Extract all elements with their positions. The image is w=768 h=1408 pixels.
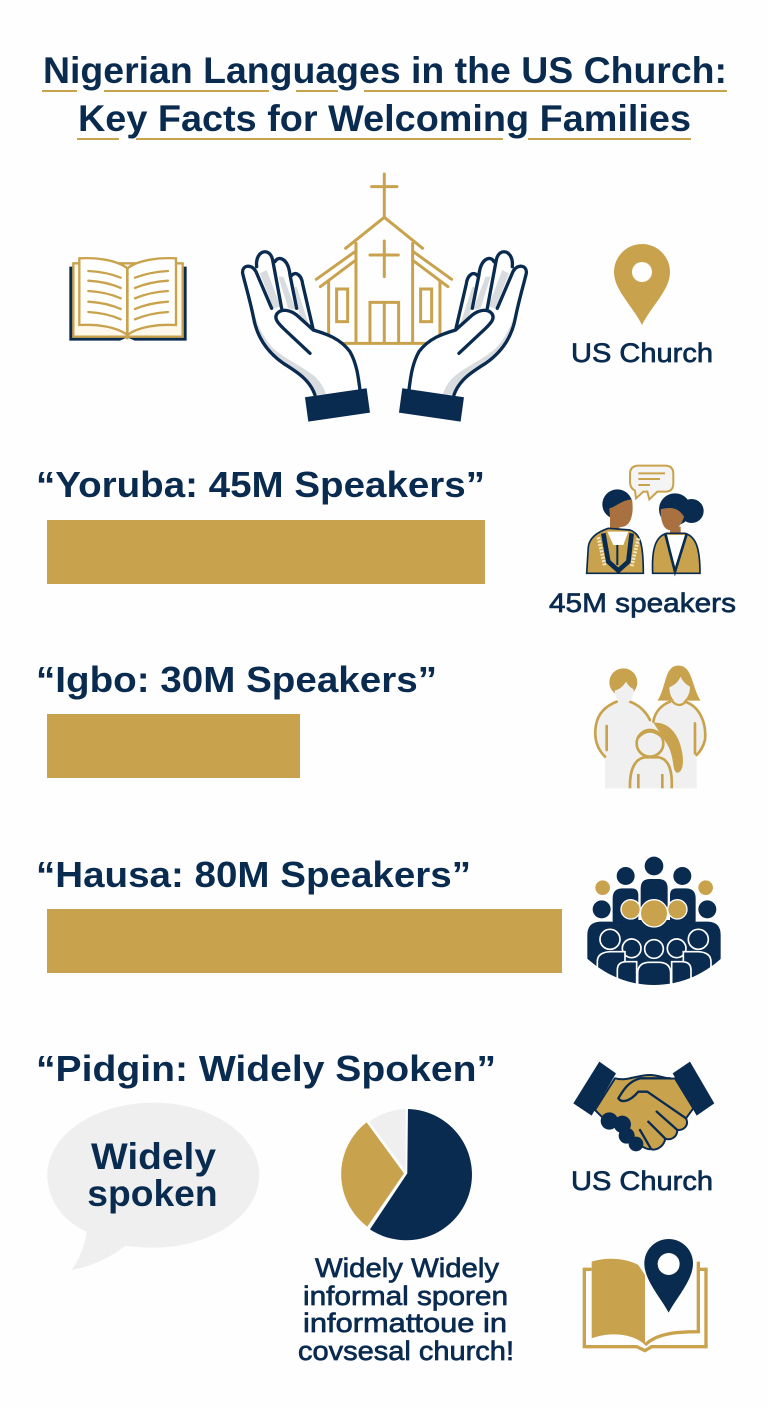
title: Key Facts for Welcoming Families	[78, 98, 691, 139]
icon: book with location pin	[584, 1239, 706, 1351]
speech bubble: spoken	[87, 1173, 218, 1214]
title: Nigerian Languages in the US Church:	[43, 50, 727, 91]
icon: handshake	[573, 1062, 714, 1151]
church	[316, 174, 452, 343]
icon: two speakers in conversation	[587, 466, 704, 573]
heading: Pidgin: “Pidgin: Widely Spoken”	[36, 1048, 496, 1089]
icon: location pin with label	[571, 244, 713, 368]
label: US Church: US Church	[571, 1166, 713, 1196]
pie chart caption: informattoue in	[303, 1308, 507, 1338]
heading: Igbo: “Igbo: 30M Speakers”	[36, 659, 437, 700]
title	[42, 50, 727, 139]
icon: crowd	[585, 857, 723, 995]
left hand	[243, 252, 370, 422]
icon: location pin with label: US Church	[571, 338, 713, 368]
bar: Hausa	[47, 909, 562, 973]
pie chart caption: covsesal church!	[298, 1336, 514, 1366]
pie chart	[341, 1109, 472, 1240]
pie chart caption: Widely Widely	[315, 1253, 500, 1283]
bar: Igbo	[47, 714, 300, 778]
icon: church between open hands	[243, 174, 526, 422]
speech bubble: Widely	[91, 1136, 217, 1177]
icon: family	[595, 666, 705, 788]
heading: Hausa: “Hausa: 80M Speakers”	[36, 854, 471, 895]
speech bubble	[47, 1103, 259, 1270]
pie chart caption	[298, 1253, 514, 1366]
heading: Yoruba: “Yoruba: 45M Speakers”	[36, 464, 485, 505]
label: 45M speakers: 45M speakers	[549, 588, 736, 618]
icon: open book	[69, 258, 187, 341]
pie chart caption: informal sporen	[303, 1281, 508, 1311]
right hand	[399, 252, 526, 422]
bar: Yoruba	[47, 520, 485, 584]
